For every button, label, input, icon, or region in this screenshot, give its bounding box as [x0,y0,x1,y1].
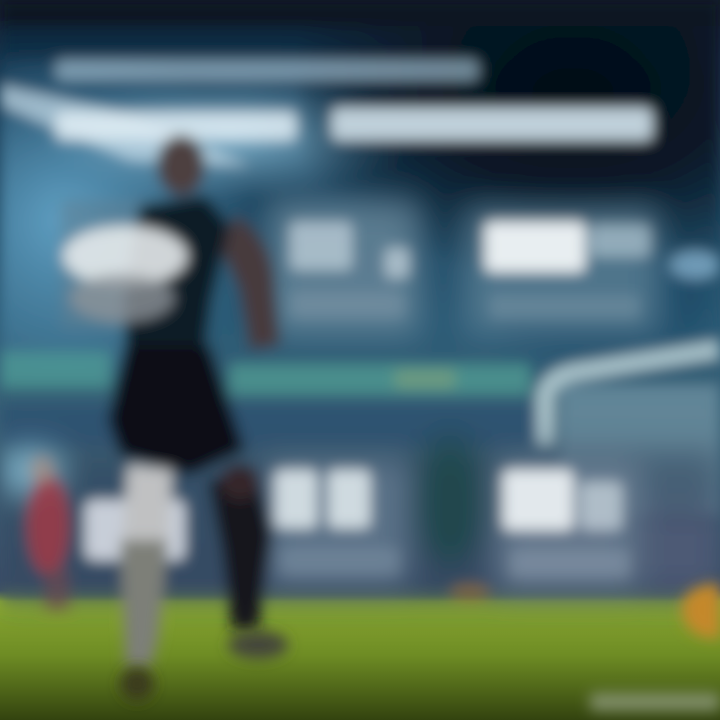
player front foot [120,667,154,701]
stat panel 2 [270,200,420,335]
stat panel 4 [85,500,185,560]
player front leg upper [122,465,172,545]
player rear knee [220,464,260,500]
panel: bottom row statistics [85,460,640,590]
stat panel 1 [60,200,195,330]
footer text block [590,693,720,711]
player rear leg [208,475,272,630]
background player in red [27,456,69,610]
player jersey [125,195,230,355]
goal frame [545,349,720,515]
teal stadium band [0,352,540,447]
football at right [682,584,720,638]
panel: top row statistics [60,200,660,335]
player rear foot [228,631,288,659]
pitch marker [450,584,490,600]
main player [63,135,280,668]
crowd and lower background [0,435,720,600]
heading line 1 [56,60,478,80]
player front leg lower [120,540,168,668]
heading line 2 left [56,112,296,140]
stat panel 3 [465,205,660,335]
stat panel 6 [495,460,640,590]
player shorts [108,345,245,475]
heading [56,60,652,140]
ball lower half [70,274,174,322]
heading line 2 right [332,108,652,140]
player arm [222,215,280,350]
player head [157,135,205,195]
stat panel 5 [265,460,410,585]
player hand and ball [63,226,187,286]
grass details [120,584,720,711]
